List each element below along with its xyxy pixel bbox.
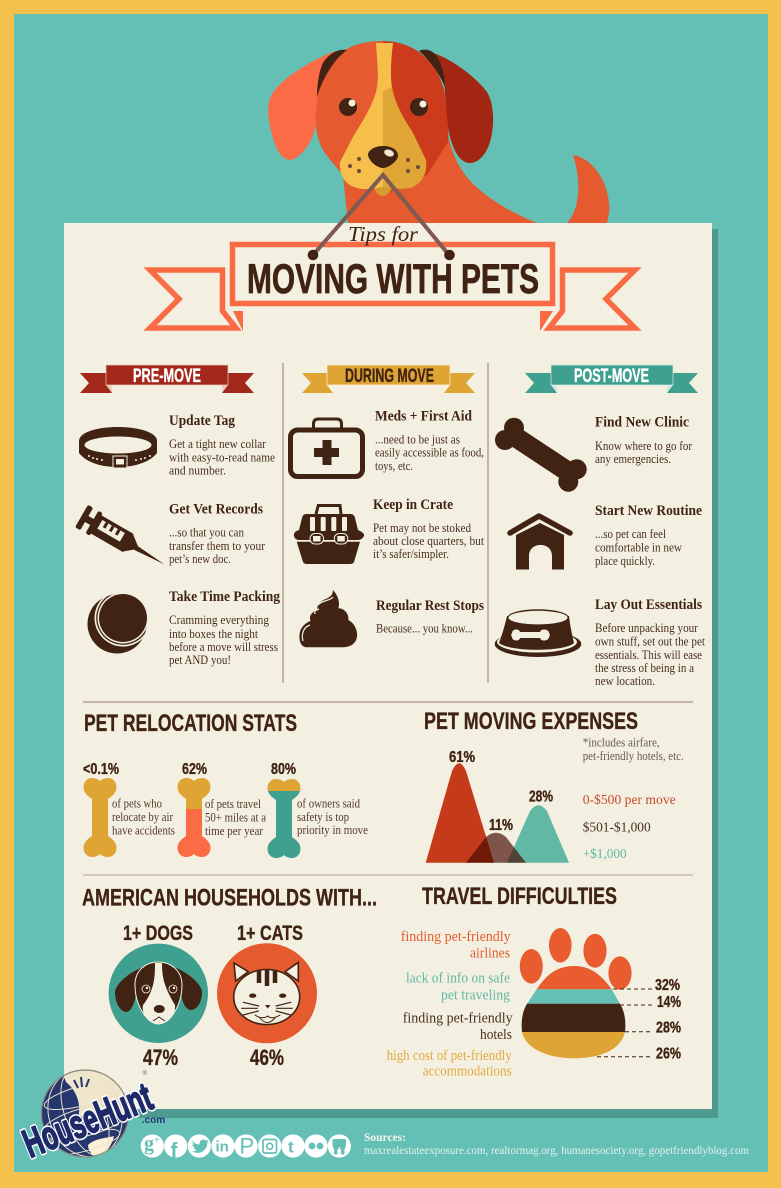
icon: collar (79, 427, 157, 468)
title banner (150, 175, 635, 331)
ribbon: pre-move (80, 365, 254, 393)
text: get vet records: transfer them to your (169, 539, 266, 553)
icon: google plus: + (154, 1135, 160, 1146)
stat: safety priority: 80% (271, 761, 296, 778)
hanging strap (308, 175, 455, 260)
mountain chart: 61% (449, 749, 475, 766)
legend: +$1,000 (583, 847, 627, 862)
script subtitle: Tips for (348, 222, 419, 246)
text: update tag (169, 413, 275, 478)
text: take time packing: before a move will stress (169, 640, 278, 654)
text: keep in crate: it’s safer/simpler. (373, 547, 449, 561)
stat: air accidents (83, 761, 175, 857)
left ribbon tail (150, 270, 236, 328)
footnote: pet-friendly hotels, etc. (583, 749, 684, 763)
text: keep in crate: Keep in Crate (373, 497, 454, 513)
icon: globe (40, 1069, 128, 1158)
logo wordmark: HouseHunt (17, 1075, 159, 1166)
ribbon: during move: DURING MOVE (345, 366, 434, 387)
icon: crate (294, 506, 364, 564)
stat: travel 50+ miles: 50+ miles at a (205, 811, 266, 825)
text: update tag: and number. (169, 464, 226, 478)
dog nose (368, 146, 398, 168)
ribbon: post-move: POST-MOVE (574, 366, 649, 387)
label: airlines: finding pet-friendly (401, 929, 511, 945)
column: during move (290, 365, 484, 647)
stat: safety priority: priority in move (297, 823, 368, 837)
text: meds + first aid (375, 409, 484, 473)
text: take time packing: Take Time Packing (169, 589, 281, 605)
stat: air accidents: <0.1% (83, 761, 119, 778)
icon: flickr (309, 1143, 323, 1149)
sources: Sources: (364, 1132, 406, 1144)
text: get vet records: Get Vet Records (169, 502, 263, 518)
stat: travel 50+ miles: of pets travel (205, 797, 261, 811)
cats stat: 1+ CATS (237, 922, 303, 945)
text: take time packing: Cramming everything (169, 613, 270, 627)
text: regular rest stops: Regular Rest Stops (376, 598, 484, 614)
label: lack of info: pet traveling (441, 987, 510, 1003)
stat: air accidents: of pets who (112, 797, 162, 811)
text: update tag: Get a tight new collar (169, 437, 267, 451)
icon: first aid kit (290, 419, 362, 476)
text: meds + first aid: toys, etc. (375, 459, 413, 473)
social icons (141, 1133, 351, 1162)
heading: AMERICAN HOUSEHOLDS WITH... (82, 885, 377, 912)
icon: poop (299, 590, 357, 647)
text: get vet records: ...so that you can (169, 526, 245, 540)
paw percent callouts (597, 977, 681, 1062)
text: meds + first aid: ...need to be just as (375, 432, 460, 446)
paper panel (64, 223, 712, 1109)
logo domain: .com (142, 1114, 165, 1126)
label: high cost (387, 1048, 512, 1080)
text: start new routine: comfortable in new (595, 540, 683, 554)
label: hotels: finding pet-friendly (403, 1011, 513, 1027)
legend: $501-$1,000 (583, 821, 651, 836)
label: high cost: accommodations (423, 1064, 512, 1080)
text: keep in crate (373, 497, 484, 561)
ribbon: pre-move: PRE-MOVE (133, 366, 201, 387)
dog blaze right (383, 87, 426, 189)
text: find new clinic: any emergencies. (595, 452, 671, 466)
title box (232, 244, 552, 304)
paw percent callouts: 28% (656, 1020, 681, 1037)
panel: pet moving expenses (424, 708, 684, 863)
label: high cost: high cost of pet-friendly (387, 1048, 512, 1064)
illustration: dog (268, 41, 609, 223)
dog head right (383, 41, 448, 195)
paw percent callouts: 32% (655, 977, 680, 994)
text: start new routine: place quickly. (595, 554, 655, 568)
mountain chart: 11% (489, 817, 513, 834)
icon: instagram (263, 1140, 276, 1153)
icon: paw chart (515, 928, 635, 1062)
dog left ear (268, 51, 335, 160)
icon: cat face (234, 962, 300, 1024)
dog ear patch left (317, 50, 347, 97)
dogs stat: 1+ DOGS (123, 922, 193, 945)
cats stat (217, 922, 317, 1070)
panel: pet relocation stats (83, 710, 368, 860)
icon: slideshare (332, 1139, 346, 1154)
stat: air accidents: relocate by air (112, 810, 174, 824)
icon: food bowl (495, 609, 581, 657)
paper shadow (70, 229, 718, 1118)
text: lay out essentials: own stuff, set out the pet (595, 634, 705, 648)
column dividers (283, 363, 488, 683)
footnote: *includes airfare, (583, 736, 660, 750)
text: meds + first aid: Meds + First Aid (375, 409, 472, 425)
text: take time packing: pet AND you! (169, 653, 231, 667)
dog chin (373, 186, 393, 196)
dog eyes (339, 98, 428, 116)
ribbon: during move (302, 365, 475, 393)
text: find new clinic: Find New Clinic (595, 415, 690, 431)
column: pre-move (75, 365, 281, 667)
text: take time packing (169, 589, 281, 667)
label: hotels: hotels (480, 1027, 512, 1043)
panel: american households (82, 885, 377, 1070)
text: keep in crate: Pet may not be stoked (373, 521, 472, 535)
icon: pinterest: P (240, 1134, 254, 1158)
text: lay out essentials: essentials. This will ease (595, 648, 702, 662)
text: lay out essentials: new location. (595, 674, 655, 688)
logo wordmark: HouseHunt (17, 1075, 159, 1166)
cats stat: 46% (250, 1045, 284, 1070)
dogs stat: 47% (143, 1045, 178, 1070)
text: keep in crate: about close quarters, but (373, 534, 484, 548)
icon: bone (495, 418, 587, 492)
heading: PET MOVING EXPENSES (424, 708, 638, 735)
mountain chart: 28% (529, 789, 553, 806)
label: airlines (401, 929, 511, 962)
stat: travel 50+ miles: time per year (205, 824, 264, 838)
text: update tag: with easy-to-read name (169, 450, 275, 464)
column: post-move (495, 365, 705, 688)
heading: TRAVEL DIFFICULTIES (422, 883, 617, 910)
stat: safety priority: safety is top (297, 810, 349, 824)
text: regular rest stops: Because... you know... (376, 622, 473, 636)
heading: PET RELOCATION STATS (84, 710, 297, 737)
dog tail (567, 155, 609, 223)
legend: 0-$500 per move (583, 793, 676, 808)
dogs stat (109, 922, 208, 1070)
dog body (343, 135, 537, 223)
dog right ear (420, 50, 493, 163)
sources (364, 1132, 749, 1157)
label: lack of info: lack of info on safe (406, 971, 510, 987)
icon: dog face (115, 962, 202, 1024)
paw percent callouts: 26% (656, 1045, 681, 1062)
stat: safety priority (266, 761, 368, 860)
icon: twitter (192, 1140, 209, 1153)
label: hotels (403, 1011, 513, 1043)
text: get vet records: pet’s new doc. (169, 552, 231, 566)
stat: air accidents: have accidents (112, 823, 175, 837)
logo wordmark (17, 1075, 159, 1166)
text: lay out essentials: Before unpacking your (595, 621, 699, 635)
dog ear patch right (419, 50, 445, 87)
dog whisker dots (348, 157, 420, 173)
ribbon: post-move (525, 365, 698, 393)
icon: tumblr: t (288, 1138, 294, 1156)
paw percent callouts: 14% (657, 994, 681, 1011)
sources: maxrealestateexposure.com, realtormag.org, humanesociety.org, gopetfriendlyblog.com (364, 1145, 749, 1157)
icon: dog house (510, 516, 570, 570)
stat: travel 50+ miles (176, 761, 266, 859)
legend (583, 793, 676, 862)
stat: safety priority: of owners said (297, 797, 361, 811)
text: start new routine (595, 503, 703, 568)
text: find new clinic (595, 415, 693, 466)
mountain chart (426, 749, 569, 863)
text: find new clinic: Know where to go for (595, 439, 693, 453)
title text: MOVING WITH PETS (247, 255, 539, 302)
stat: travel 50+ miles: 62% (182, 761, 207, 778)
text: lay out essentials (595, 597, 705, 688)
text: update tag: Update Tag (169, 413, 236, 429)
footnote (583, 736, 684, 763)
registered mark: ® (142, 1070, 148, 1077)
text: take time packing: into boxes the night (169, 627, 258, 641)
text: regular rest stops (376, 598, 484, 636)
icon: ball (88, 594, 147, 654)
right ribbon tail (549, 270, 635, 328)
text: meds + first aid: easily accessible as food, (375, 446, 484, 460)
text: lay out essentials: the stress of being in a (595, 661, 694, 675)
icon: syringe (75, 505, 171, 575)
text: start new routine: ...so pet can feel (595, 527, 666, 541)
logo: househunt (20, 1069, 165, 1160)
icon: linkedin: in (216, 1138, 229, 1156)
ribbon folds (233, 311, 553, 331)
text: get vet records (169, 502, 266, 566)
dog head left (316, 41, 383, 195)
text: start new routine: Start New Routine (595, 503, 703, 519)
dog blaze left (340, 43, 393, 189)
icon: google plus: g (144, 1133, 154, 1155)
text: lay out essentials: Lay Out Essentials (595, 597, 702, 613)
label: lack of info (406, 971, 510, 1003)
icon: facebook: f (170, 1140, 178, 1162)
label: airlines: airlines (470, 946, 510, 962)
panel: travel difficulties (387, 883, 681, 1080)
